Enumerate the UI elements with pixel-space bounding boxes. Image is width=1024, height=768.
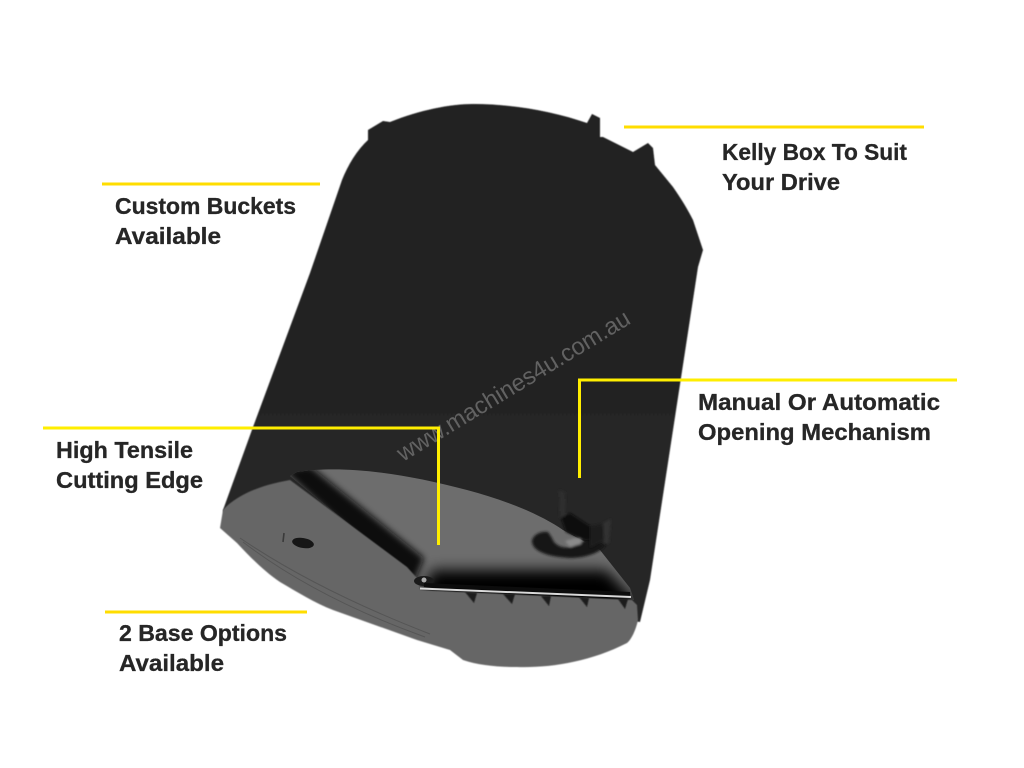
label: cutting edge: Cutting Edge <box>56 467 203 493</box>
label: Kelly box <box>722 139 907 195</box>
label: base options: 2 Base Options <box>119 620 287 646</box>
plate shading <box>290 470 634 600</box>
label: opening mechanism <box>698 389 940 445</box>
label: Kelly box: Kelly Box To Suit <box>722 139 907 165</box>
bolt at edge <box>414 576 434 586</box>
base plate seams <box>240 538 430 637</box>
callout line: Kelly box <box>624 126 924 128</box>
bucket illustration <box>220 104 703 667</box>
latch bracket <box>559 490 611 548</box>
label: custom buckets <box>115 193 296 249</box>
lower base plate <box>220 480 638 667</box>
bucket body <box>223 104 703 622</box>
watermark: www.machines4u.com.au <box>391 305 635 468</box>
label: opening mechanism: Manual Or Automatic <box>698 389 940 415</box>
label: cutting edge <box>56 437 203 493</box>
callout line: cutting edge <box>43 428 438 545</box>
small mark <box>283 533 284 542</box>
cutting edge <box>420 585 631 597</box>
diagonal shadow band <box>290 470 428 578</box>
hinge cut-out with hook <box>532 532 606 558</box>
cutting teeth <box>465 592 628 609</box>
callout line: base options <box>105 610 307 614</box>
mounting hole <box>291 536 315 550</box>
label: Kelly box: Your Drive <box>722 169 840 195</box>
label: custom buckets: Available <box>115 223 221 249</box>
infographic: bucket diagram with callouts <box>43 103 957 672</box>
label: cutting edge: High Tensile <box>56 437 193 463</box>
label: base options: Available <box>119 650 224 676</box>
callout line: opening mechanism <box>580 380 957 478</box>
label: opening mechanism: Opening Mechanism <box>698 419 931 445</box>
callout line: custom buckets <box>102 182 320 186</box>
upper base plate <box>290 469 634 600</box>
label: base options <box>119 620 287 676</box>
label: custom buckets: Custom Buckets <box>115 193 296 219</box>
shaded opening under plate <box>415 570 645 610</box>
